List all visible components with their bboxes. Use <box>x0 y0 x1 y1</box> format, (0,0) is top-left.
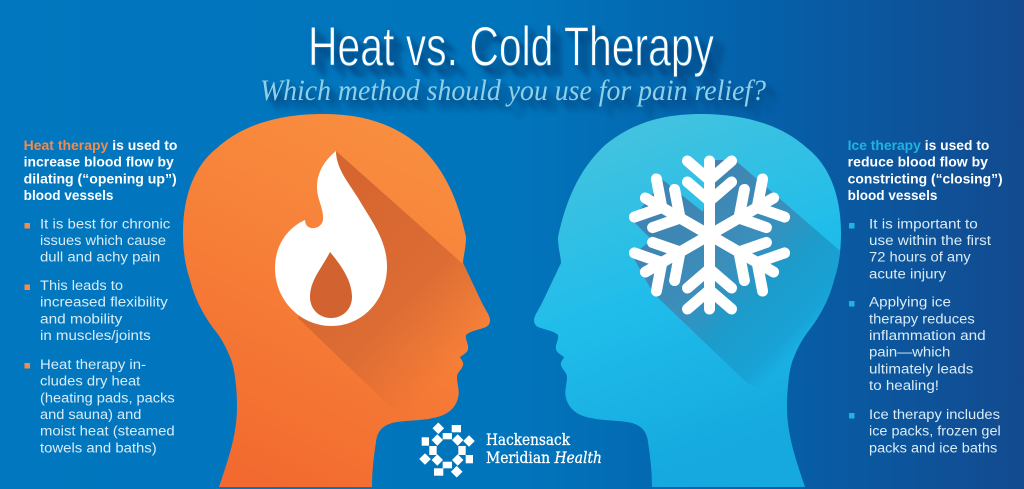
heading: heat therapy: increase blood flow by <box>24 155 174 170</box>
icon: logo ring of squares <box>419 422 475 478</box>
bullet: dry and moist heat: and sauna) and <box>40 407 141 422</box>
heading: heat therapy <box>24 138 177 203</box>
logo text: Hackensack <box>486 431 571 449</box>
snowflake long shadow <box>634 160 840 384</box>
panel: ice therapy text <box>848 138 1003 455</box>
logo text <box>486 431 602 467</box>
heading: heat therapy: Heat therapy is used to <box>24 138 177 153</box>
heading: ice therapy: constricting (“closing”) <box>848 171 1003 186</box>
bullet: ice packs: ice packs, frozen gel <box>869 424 1001 439</box>
bullet: reduces inflammation: to healing! <box>869 378 939 393</box>
blue head with snowflake <box>534 114 860 487</box>
heading: heat therapy: dilating (“opening up”) <box>24 171 177 186</box>
bullet: dry and moist heat: cludes dry heat <box>40 374 141 389</box>
bullet: flexibility: and mobility <box>40 311 123 326</box>
bullet: reduces inflammation: Applying ice <box>869 295 951 310</box>
heading: ice therapy: blood vessels <box>848 188 937 203</box>
bullet: first 72 hours: 72 hours of any <box>869 250 971 265</box>
bullet: reduces inflammation: therapy reduces <box>869 311 975 326</box>
heading: ice therapy: Ice therapy is used to <box>848 138 989 153</box>
bullet: chronic issues <box>24 216 171 265</box>
title: Heat vs. Cold Therapy <box>308 14 714 78</box>
bullet: reduces inflammation: inflammation and <box>869 328 986 343</box>
bullet: flexibility <box>24 278 168 343</box>
bullet: first 72 hours: It is important to <box>869 216 978 231</box>
bullet: dry and moist heat: (heating pads, packs <box>40 390 175 405</box>
bullet: first 72 hours <box>849 216 991 281</box>
bullet: ice packs <box>849 407 1001 455</box>
icon: snowflake <box>634 161 785 309</box>
bullet: dry and moist heat: towels and baths) <box>40 440 157 455</box>
bullet: reduces inflammation: pain—which <box>869 345 950 360</box>
bullet: ice packs: Ice therapy includes <box>869 407 1000 422</box>
bullet: flexibility: increased flexibility <box>40 295 168 310</box>
heading: ice therapy: reduce blood flow by <box>848 155 989 170</box>
bullet: chronic issues: issues which cause <box>40 233 166 248</box>
icon: flame <box>275 151 387 326</box>
heading: heat therapy: blood vessels <box>24 188 113 203</box>
bullet: dry and moist heat: moist heat (steamed <box>40 424 175 439</box>
bullet: first 72 hours: use within the first <box>869 233 991 248</box>
bullet: chronic issues: It is best for chronic <box>40 216 171 231</box>
bullet: flexibility: This leads to <box>40 278 123 293</box>
heading: ice therapy <box>848 138 1003 203</box>
bullet: reduces inflammation <box>849 295 986 393</box>
panel: heat therapy text <box>24 138 177 455</box>
bullet: reduces inflammation: ultimately leads <box>869 361 974 376</box>
orange head with flame <box>183 114 500 489</box>
bullet: dry and moist heat <box>24 357 175 455</box>
bullet: chronic issues: dull and achy pain <box>40 250 160 265</box>
logo text: Meridian Health <box>486 449 602 467</box>
bullet: first 72 hours: acute injury <box>869 266 946 281</box>
bullet: ice packs: packs and ice baths <box>869 440 998 455</box>
head silhouette: blue <box>534 114 841 487</box>
bullet: flexibility: in muscles/joints <box>40 328 151 343</box>
flame long shadow <box>298 151 486 398</box>
bullet: dry and moist heat: Heat therapy in- <box>40 357 146 372</box>
logo: Hackensack Meridian Health <box>419 422 602 478</box>
head silhouette: orange <box>183 114 490 487</box>
subtitle: Which method should you use for pain relief? <box>260 74 766 107</box>
